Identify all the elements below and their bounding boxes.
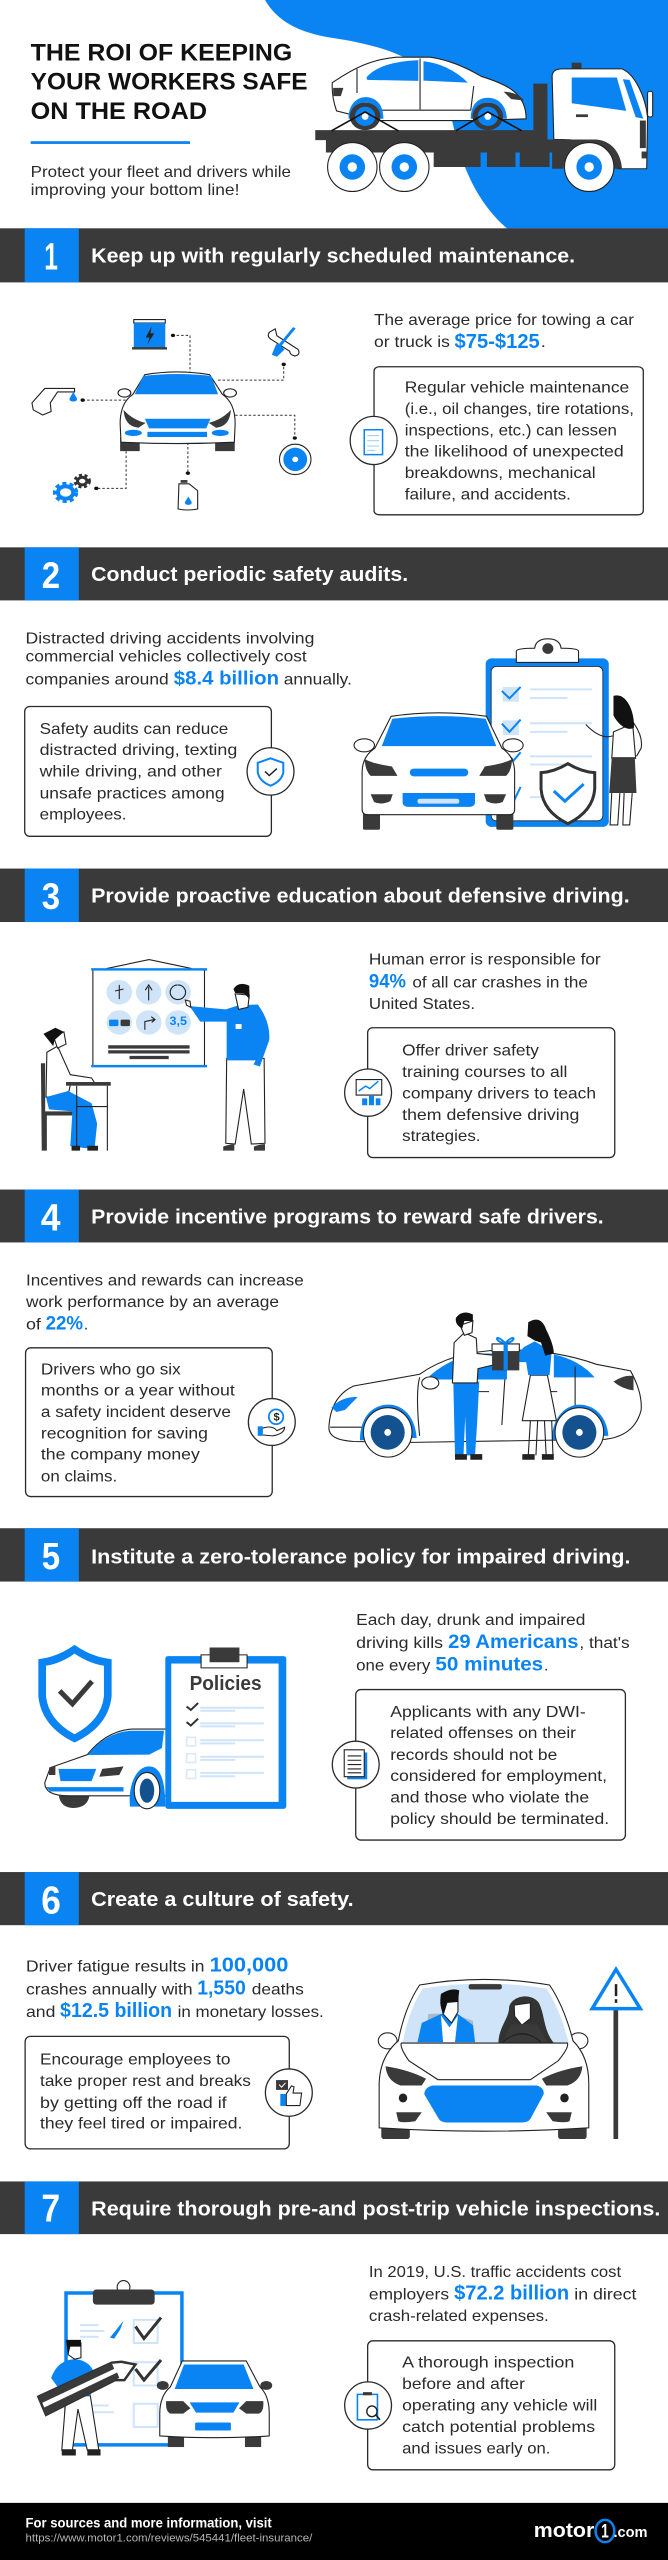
shield xyxy=(541,764,595,824)
text: impaired driving deaths: , that's xyxy=(579,1635,630,1652)
callout: recognition: a safety incident deserve xyxy=(41,1404,231,1421)
text: driver fatigue: $12.5 billion xyxy=(60,2000,172,2022)
section 6 banner: Create a culture of safety. xyxy=(91,1889,354,1911)
text: incentives: work performance by an average xyxy=(25,1294,279,1311)
section 7 banner xyxy=(0,2181,668,2234)
callout: rest and breaks: they feel tired or impaired. xyxy=(40,2115,242,2133)
illustration: policies clipboard, shield and car xyxy=(38,1645,286,1809)
shield xyxy=(38,1645,112,1742)
text: traffic accident costs xyxy=(369,2264,637,2325)
driver figure xyxy=(417,1989,475,2042)
mechanic with pencil xyxy=(38,2340,135,2456)
callout: safety audits: distracted driving, texting xyxy=(40,741,237,759)
callout: regular maintenance: the likelihood of unexpected xyxy=(405,442,624,460)
callout: driver training: strategies. xyxy=(402,1128,481,1145)
text: distracted driving cost: companies around xyxy=(26,671,169,688)
blue background blob xyxy=(265,0,668,228)
illustration: car with gift exchange xyxy=(329,1312,641,1460)
section 4 banner xyxy=(0,1190,668,1242)
text: human error: United States. xyxy=(369,995,475,1013)
text: driver fatigue: deaths xyxy=(252,1981,304,1998)
logo: motor1.com: 1 xyxy=(601,2521,609,2543)
icon: gears xyxy=(55,475,89,501)
icon: battery xyxy=(132,320,167,350)
text: distracted driving cost: commercial vehicles collectively cost xyxy=(26,648,307,666)
callout: safety audits: while driving, and other xyxy=(39,763,223,781)
callout: thorough inspection: A thorough inspection xyxy=(402,2354,574,2372)
clipboard: Policies xyxy=(190,1673,262,1695)
callout: driver training: training courses to all xyxy=(402,1063,567,1081)
callout: DWI policy xyxy=(332,1690,625,1840)
callout: recognition: the company money xyxy=(41,1447,200,1464)
text: distracted driving cost: annually. xyxy=(284,671,352,688)
title: YOUR WORKERS SAFE xyxy=(31,67,308,95)
callout: recognition: Drivers who go six xyxy=(41,1361,181,1378)
text: driver fatigue: Driver fatigue results in xyxy=(26,1958,204,1976)
poster xyxy=(91,960,207,1067)
icon: clipboard xyxy=(350,416,397,465)
callout: recognition: recognition for saving xyxy=(41,1425,208,1443)
section 6 banner: 6 xyxy=(41,1879,61,1923)
callout: driver training: company drivers to teach xyxy=(402,1085,596,1102)
section 2 banner xyxy=(0,547,668,600)
section 5 banner: Institute a zero-tolerance policy for impaired driving. xyxy=(91,1546,631,1568)
callout: driver training xyxy=(345,1028,615,1158)
car xyxy=(45,1729,166,1809)
passenger figure xyxy=(498,1996,554,2043)
callout: DWI policy: records should not be xyxy=(390,1747,557,1764)
panel: sections 4 and 5 xyxy=(0,1190,668,1840)
clipboard xyxy=(165,1647,286,1809)
text: towing price: The average price for towing a car xyxy=(374,311,634,329)
callout: DWI policy: policy should be terminated. xyxy=(390,1811,609,1828)
callout: regular maintenance: (i.e., oil changes, tire rotations, xyxy=(405,400,634,417)
text: traffic accident costs: $72.2 billion xyxy=(454,2282,569,2305)
text: driver fatigue: 100,000 xyxy=(210,1954,288,1977)
text: incentives xyxy=(25,1272,304,1335)
title xyxy=(31,38,308,124)
illustration: driver and passenger with warning sign xyxy=(378,1969,640,2139)
text: distracted driving cost: Distracted driving accidents involving xyxy=(26,630,314,648)
illustration: maintenance diagram xyxy=(32,320,311,510)
callout: regular maintenance: Regular vehicle maintenance xyxy=(405,378,629,396)
footer: https://www.motor1.com/reviews/545441/fleet-insurance/ xyxy=(26,2532,313,2545)
gift box xyxy=(492,1338,519,1370)
text: impaired driving deaths: 50 minutes xyxy=(435,1653,543,1676)
text: driver fatigue xyxy=(26,1954,324,2022)
icon: car front xyxy=(118,372,236,451)
panel: header and section 1 xyxy=(0,0,668,515)
subtitle: Protect your fleet and drivers while xyxy=(31,163,291,181)
section 7 banner: 7 xyxy=(41,2187,60,2231)
subtitle xyxy=(31,163,291,198)
text: distracted driving cost: $8.4 billion xyxy=(174,668,279,689)
text: impaired driving deaths xyxy=(356,1612,630,1676)
title rule xyxy=(31,141,190,144)
title: ON THE ROAD xyxy=(31,97,207,124)
text: towing price: . xyxy=(541,333,546,351)
section 5 banner xyxy=(0,1528,668,1582)
text: human error xyxy=(369,951,601,1013)
logo: motor1.com xyxy=(534,2520,648,2543)
callout: safety audits xyxy=(25,707,294,836)
callout: driver training: Offer driver safety xyxy=(402,1042,540,1059)
text: driver fatigue: crashes annually with xyxy=(26,1981,193,1998)
panel: sections 6 and 7 xyxy=(0,1872,668,2560)
section 1 banner xyxy=(0,228,668,282)
text: incentives: . xyxy=(84,1317,88,1334)
illustration: car, clipboard and inspector xyxy=(354,639,642,830)
car front xyxy=(157,2361,272,2447)
icon: shield xyxy=(247,748,294,795)
icon: wrench and screwdriver xyxy=(268,327,299,357)
text: impaired driving deaths: . xyxy=(544,1657,548,1675)
section 3 banner xyxy=(0,869,668,922)
callout: thorough inspection xyxy=(345,2341,615,2470)
section 6 banner xyxy=(0,1872,668,1925)
illustration: tow truck with car xyxy=(315,57,653,191)
callout: thorough inspection: operating any vehicle will xyxy=(402,2397,597,2415)
text: traffic accident costs: in direct xyxy=(574,2286,637,2304)
text: human error: of all car crashes in the xyxy=(412,974,588,992)
callout: rest and breaks: by getting off the road if xyxy=(40,2094,227,2112)
callout: DWI policy: related offenses on their xyxy=(390,1725,577,1742)
text: towing price: or truck is xyxy=(374,333,450,351)
callout: recognition xyxy=(26,1348,295,1497)
icon: money in hand xyxy=(248,1399,295,1445)
icon: tire xyxy=(279,444,311,475)
text: towing price: $75-$125 xyxy=(455,330,540,352)
text: impaired driving deaths: driving kills xyxy=(356,1635,443,1652)
callout: rest and breaks: Encourage employees to xyxy=(40,2051,231,2069)
man xyxy=(452,1312,496,1460)
callout: rest and breaks xyxy=(25,2036,312,2149)
callout: safety audits: employees. xyxy=(40,806,127,824)
section 2 banner: 2 xyxy=(42,555,60,596)
callout: DWI policy: Applicants with any DWI- xyxy=(390,1704,586,1721)
icon: oil jug xyxy=(178,480,198,510)
text: traffic accident costs: crash-related expenses. xyxy=(369,2308,549,2325)
callout: thorough inspection: before and after xyxy=(402,2376,525,2393)
logo: motor1.com: .com xyxy=(613,2525,648,2541)
text: incentives: Incentives and rewards can increase xyxy=(26,1272,304,1289)
callout: safety audits: Safety audits can reduce xyxy=(40,720,228,738)
callout: regular maintenance: breakdowns, mechanical xyxy=(405,464,596,482)
text: driver fatigue: 1,550 xyxy=(197,1977,246,1999)
text: traffic accident costs: In 2019, U.S. traffic accidents cost xyxy=(369,2264,622,2281)
callout: thorough inspection: catch potential problems xyxy=(402,2419,595,2436)
illustration: inspection checklist, mechanic and car xyxy=(38,2281,272,2456)
callout: safety audits: unsafe practices among xyxy=(40,785,225,802)
callout: recognition: months or a year without xyxy=(41,1382,235,1400)
icon: fuel nozzle xyxy=(32,388,77,415)
text: towing price xyxy=(374,311,634,352)
poster: 3,5 xyxy=(170,1014,187,1028)
section 5 banner: 5 xyxy=(42,1536,60,1578)
title: THE ROI OF KEEPING xyxy=(31,38,292,66)
text: impaired driving deaths: one every xyxy=(356,1657,430,1675)
icon: clipboard with magnifier xyxy=(345,2382,392,2429)
logo: motor1.com: motor xyxy=(534,2520,594,2542)
text: impaired driving deaths: 29 Americans xyxy=(448,1631,579,1653)
text: human error: 94% xyxy=(369,971,406,993)
clipboard xyxy=(66,2281,182,2445)
icon: warning sign xyxy=(592,1969,640,2139)
icon: presentation xyxy=(345,1069,392,1116)
woman seated at desk xyxy=(41,1028,111,1151)
callout: regular maintenance: failure, and accidents. xyxy=(405,485,571,503)
text: incentives: of xyxy=(26,1317,42,1334)
section 7 banner: Require thorough pre-and post-trip vehicle inspections. xyxy=(91,2198,660,2220)
icon: document xyxy=(332,1741,379,1788)
section 3 banner: Provide proactive education about defensive driving. xyxy=(91,885,630,907)
text: driver fatigue: and xyxy=(26,2004,55,2021)
text: human error: Human error is responsible for xyxy=(369,951,601,968)
icon: thumbs up xyxy=(265,2069,312,2116)
section 1 banner: Keep up with regularly scheduled maintenance. xyxy=(91,245,575,267)
section 3 banner: 3 xyxy=(42,876,60,917)
callout: driver training: them defensive driving xyxy=(402,1106,579,1124)
subtitle: improving your bottom line! xyxy=(31,181,239,198)
car front xyxy=(354,713,523,830)
panel: sections 2 and 3 xyxy=(0,547,668,1158)
section 4 banner: Provide incentive programs to reward safe drivers. xyxy=(91,1206,604,1228)
callout: thorough inspection: and issues early on. xyxy=(402,2440,550,2457)
text: traffic accident costs: employers xyxy=(369,2286,449,2304)
text: incentives: 22% xyxy=(46,1312,83,1335)
section 2 banner: Conduct periodic safety audits. xyxy=(91,563,408,586)
callout: recognition: on claims. xyxy=(41,1468,117,1485)
woman xyxy=(586,695,642,825)
footer: For sources and more information, visit xyxy=(26,2515,272,2530)
callout: regular maintenance: inspections, etc.) can lessen xyxy=(405,421,617,439)
woman xyxy=(518,1320,556,1460)
callout: rest and breaks: take proper rest and breaks xyxy=(40,2073,251,2090)
text: impaired driving deaths: Each day, drunk and impaired xyxy=(356,1612,585,1629)
footer xyxy=(0,2503,668,2560)
text: distracted driving cost xyxy=(26,630,352,689)
man presenter xyxy=(185,984,269,1151)
section 4 banner: 4 xyxy=(41,1197,60,1239)
callout: regular maintenance xyxy=(350,367,643,515)
icon: money in hand: $ xyxy=(274,1412,280,1424)
illustration: driving training xyxy=(41,960,269,1151)
text: driver fatigue: in monetary losses. xyxy=(178,2004,324,2021)
section 1 banner: 1 xyxy=(44,236,58,279)
callout: DWI policy: considered for employment, xyxy=(390,1768,607,1785)
callout: DWI policy: and those who violate the xyxy=(390,1789,589,1806)
